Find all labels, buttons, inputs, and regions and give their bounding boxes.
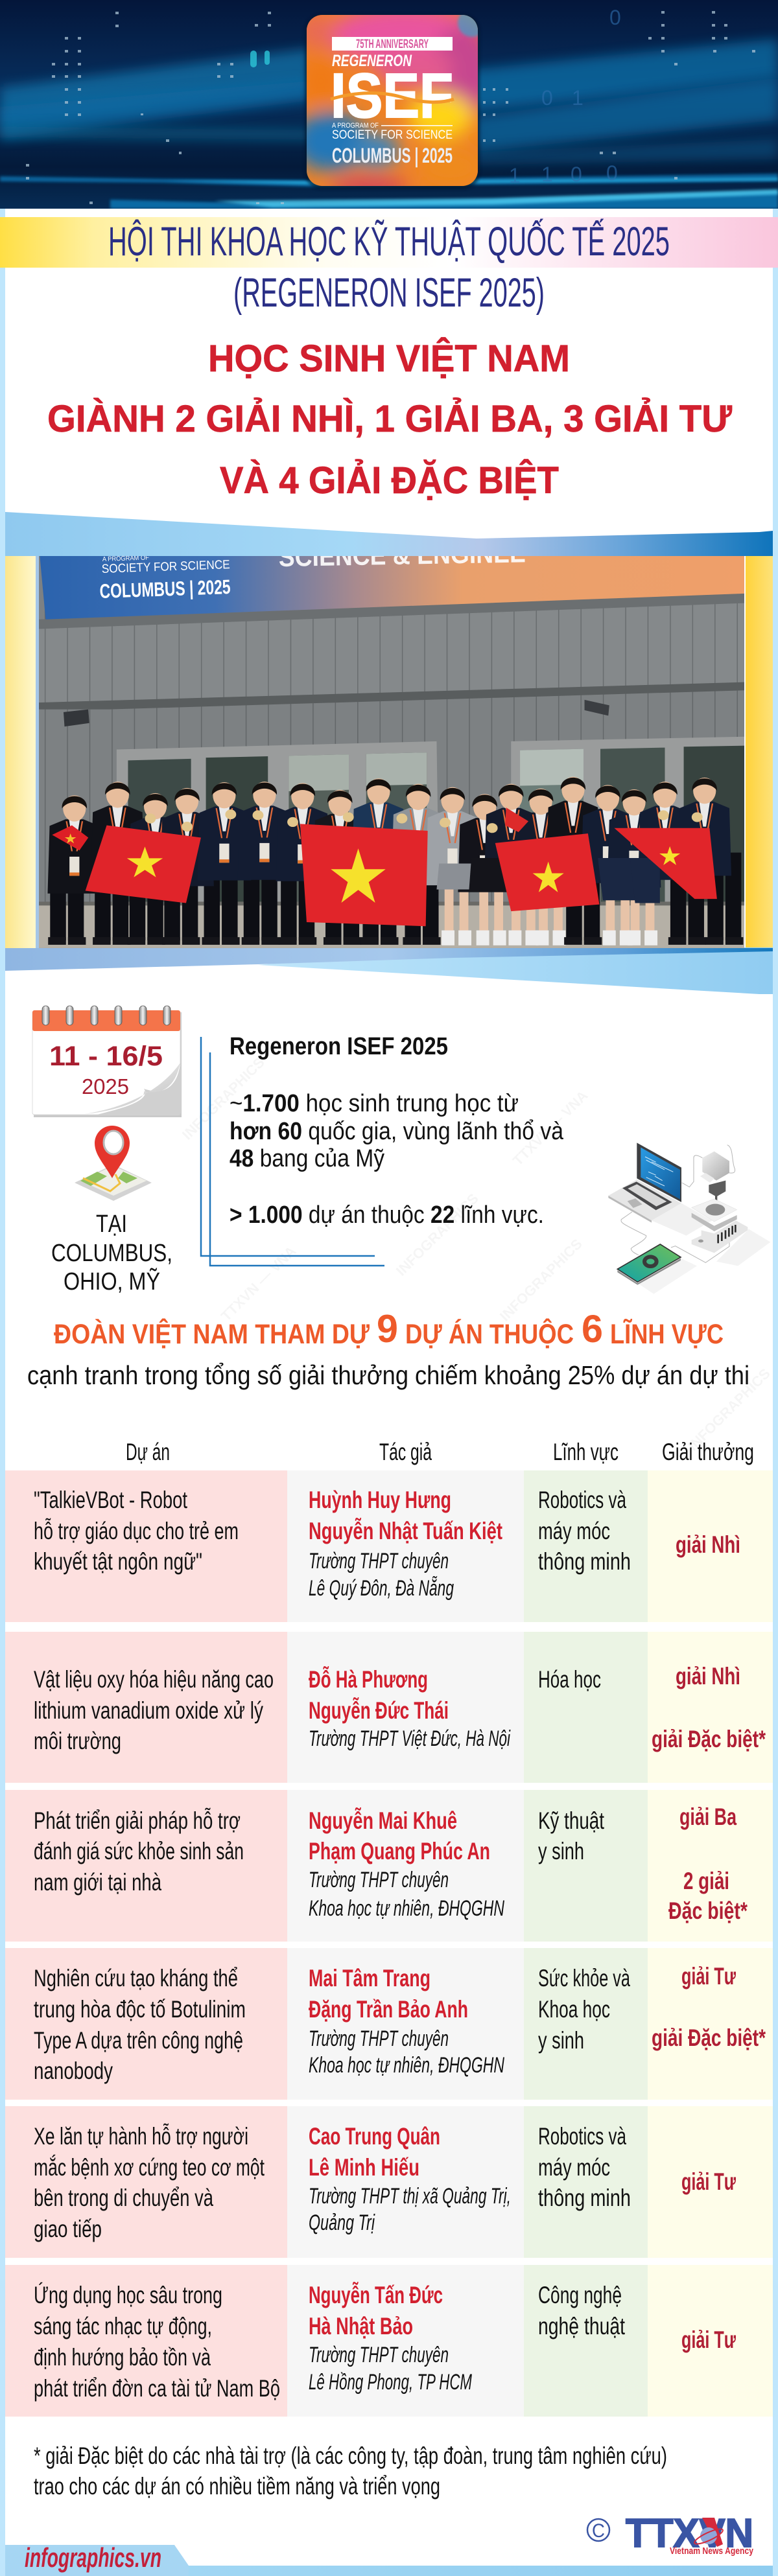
table row 6: [5, 2265, 773, 2417]
binary digits: 1: [509, 164, 521, 187]
table header: Tác giả: [379, 1439, 432, 1465]
field: Robotics và: [538, 2123, 626, 2150]
photo: Vietnamese team with flags: [36, 537, 746, 948]
date: 11 - 16/5: [49, 1041, 163, 1072]
binary digits: 0: [541, 86, 553, 110]
authors: Trường THPT chuyên: [309, 2026, 449, 2051]
awards: [668, 1804, 748, 1924]
project: Nghiên cứu tạo kháng thể: [34, 1965, 238, 1991]
project: Xe lăn tự hành hỗ trợ người: [34, 2123, 248, 2150]
field: thông minh: [538, 2185, 631, 2211]
authors: Trường THPT chuyên: [309, 1868, 449, 1892]
authors: Khoa học tự nhiên, ĐHQGHN: [309, 1896, 504, 1921]
authors: Trường THPT chuyên: [309, 2343, 449, 2367]
authors: [309, 2123, 511, 2235]
location label: COLUMBUS,: [51, 1240, 172, 1267]
field: máy móc: [538, 1518, 610, 1544]
TTXVN logo: C: [592, 2520, 605, 2542]
project: [34, 1807, 244, 1896]
location label: TẠI: [96, 1211, 127, 1238]
headline: [47, 338, 733, 502]
field: y sinh: [538, 2027, 584, 2054]
banner: [40, 556, 744, 620]
project: [34, 1487, 239, 1575]
field: nghệ thuật: [538, 2313, 626, 2339]
authors: Lê Hồng Phong, TP HCM: [309, 2370, 472, 2395]
authors: [309, 1487, 502, 1601]
authors: Phạm Quang Phúc An: [309, 1838, 490, 1864]
award: giải Tư: [681, 2168, 736, 2195]
watermark: INFOGRAPHICS: [497, 1236, 585, 1325]
headline: GIÀNH 2 GIẢI NHÌ, 1 GIẢI BA, 3 GIẢI TƯ: [47, 398, 733, 440]
authors: [309, 1965, 504, 2078]
field: [538, 1807, 605, 1864]
awards: [652, 1663, 766, 1752]
students: [48, 795, 95, 894]
field: Khoa học: [538, 1996, 610, 2023]
project: nam giới tại nhà: [34, 1869, 161, 1896]
location label: [51, 1211, 172, 1295]
authors: Trường THPT Việt Đức, Hà Nội: [309, 1726, 511, 1751]
skirts: [437, 863, 471, 889]
table row 5: [5, 2106, 773, 2258]
delegation headline: 6: [582, 1307, 603, 1351]
watermark: INFOGRAPHICS: [685, 1365, 773, 1454]
authors: Khoa học tự nhiên, ĐHQGHN: [309, 2053, 504, 2078]
project: phát triển đờn ca tài tử Nam Bộ: [34, 2375, 280, 2402]
table header: Lĩnh vực: [553, 1439, 619, 1465]
project: trung hòa độc tố Botulinim: [34, 1996, 246, 2023]
yellow side panel left: [5, 556, 36, 948]
event facts: hơn 60 quốc gia, vùng lãnh thổ và: [230, 1118, 564, 1145]
field: Hóa học: [538, 1666, 601, 1693]
table row 4: [5, 1948, 773, 2100]
watermark: INFOGRAPHICS: [179, 1054, 268, 1143]
TTXVN logo: TTXVN: [626, 2511, 753, 2556]
authors: Trường THPT chuyên: [309, 1549, 449, 1573]
headline: HỌC SINH VIỆT NAM: [208, 338, 570, 380]
awards: Đặc biệt*: [668, 1897, 748, 1924]
field: [538, 1965, 630, 2054]
project: giao tiếp: [34, 2216, 102, 2242]
upper blue ribbon: [5, 512, 773, 556]
project: Type A dựa trên công nghệ: [34, 2027, 243, 2054]
project: sáng tác nhạc tự động,: [34, 2313, 212, 2339]
watermark: TTXVN — VNA: [510, 1087, 591, 1169]
table row 1: [5, 1470, 773, 1622]
ISEF 2025 logo: SOCIETY FOR SCIENCE: [332, 128, 453, 142]
authors: Mai Tâm Trang: [309, 1965, 430, 1991]
authors: Lê Quý Đôn, Đà Nẵng: [309, 1576, 454, 1601]
authors: Hà Nhật Bảo: [309, 2313, 413, 2339]
speakers: [64, 710, 89, 726]
field: Công nghệ: [538, 2282, 622, 2308]
authors: [309, 1807, 504, 1921]
delegation headline: ĐOÀN VIỆT NAM THAM DỰ: [54, 1318, 370, 1350]
yellow side panel right: [746, 556, 773, 948]
authors: Đỗ Hà Phương: [309, 1666, 428, 1693]
field: [538, 1487, 631, 1575]
banner lettering: SCIENCE & ENGINEE: [278, 537, 526, 572]
award: giải Tư: [681, 2327, 736, 2353]
binary digits: 0: [571, 163, 582, 186]
watermark: TTXVN — VNA: [218, 1243, 300, 1325]
ISEF 2025 logo: 75TH ANNIVERSARY: [356, 38, 429, 51]
watermark: [179, 1054, 773, 1454]
watermark: INFOGRAPHICS: [393, 1190, 482, 1279]
TTXVN logo: Vietnam News Agency: [670, 2546, 754, 2557]
awards: [652, 1963, 766, 2051]
flags: [52, 826, 88, 850]
field: [538, 2282, 626, 2339]
authors: [309, 1666, 511, 1751]
field: Sức khỏe và: [538, 1965, 630, 1991]
field: Robotics và: [538, 1487, 626, 1513]
awards: giải Ba: [679, 1804, 737, 1830]
location label: OHIO, MỸ: [64, 1268, 160, 1295]
binary digits: 1: [572, 86, 584, 110]
table header: [126, 1439, 754, 1465]
binary digits: 1: [541, 163, 553, 186]
medals: [145, 809, 703, 833]
banner lettering: [100, 556, 525, 599]
event facts: ~1.700 học sinh trung học từ: [230, 1090, 519, 1117]
project: Ứng dụng học sâu trong: [34, 2282, 222, 2308]
awards: giải Nhì: [676, 1663, 740, 1689]
bracket lines: [201, 1037, 384, 1266]
ISEF 2025 logo: [303, 14, 481, 189]
title line 2: (REGENERON ISEF 2025): [233, 270, 545, 316]
ISEF 2025 logo: ISEF: [331, 60, 453, 131]
awards: giải Tư: [681, 1963, 736, 1990]
event facts: [230, 1033, 564, 1229]
photo left trim: [36, 556, 39, 948]
icon: laptop, machine and phone: [608, 1143, 770, 1294]
field: máy móc: [538, 2154, 610, 2181]
authors: Nguyễn Tấn Đức: [309, 2282, 443, 2308]
ISEF 2025 logo: REGENERON: [332, 52, 412, 70]
table row 2: [5, 1632, 773, 1783]
doors: [117, 741, 439, 910]
project: Vật liệu oxy hóa hiệu năng cao: [34, 1666, 274, 1693]
location pin icon: [75, 1126, 152, 1201]
delegation headline: DỰ ÁN THUỘC: [405, 1318, 574, 1350]
project: mắc bệnh xơ cứng teo cơ một: [34, 2154, 265, 2181]
delegation headline: 9: [377, 1307, 398, 1351]
project: [34, 2282, 280, 2402]
project: lithium vanadium oxide xử lý: [34, 1697, 263, 1724]
ISEF 2025 logo: COLUMBUS | 2025: [332, 144, 453, 167]
project: nanobody: [34, 2058, 113, 2084]
authors: Nguyễn Mai Khuê: [309, 1807, 457, 1834]
project: đánh giá sức khỏe sinh sản: [34, 1838, 244, 1864]
binary digits: [509, 6, 621, 187]
authors: Đặng Trần Bảo Anh: [309, 1996, 468, 2023]
binary digits: 0: [609, 6, 621, 29]
project: [34, 1666, 274, 1754]
project: Phát triển giải pháp hỗ trợ: [34, 1807, 241, 1834]
delegation headline: [54, 1307, 724, 1351]
binary digits: 0: [606, 161, 618, 185]
banner lettering: COLUMBUS | 2025: [99, 575, 231, 603]
banner lettering: SOCIETY FOR SCIENCE: [101, 558, 230, 576]
project: [34, 1965, 246, 2084]
site credit: infographics.vn: [25, 2542, 161, 2573]
event facts: 48 bang của Mỹ: [230, 1145, 384, 1172]
legs: [48, 893, 86, 945]
headline: VÀ 4 GIẢI ĐẶC BIỆT: [220, 459, 559, 502]
calendar icon: 2025: [82, 1074, 129, 1098]
field: thông minh: [538, 1548, 631, 1575]
authors: Huỳnh Huy Hưng: [309, 1487, 451, 1513]
award: giải Nhì: [676, 1531, 740, 1558]
authors: Cao Trung Quân: [309, 2123, 440, 2150]
project: định hướng bảo tồn và: [34, 2344, 211, 2371]
project: khuyết tật ngôn ngữ": [34, 1548, 202, 1575]
table row 3: [5, 1790, 773, 1942]
authors: Nguyễn Nhật Tuấn Kiệt: [309, 1518, 502, 1544]
field: y sinh: [538, 1838, 584, 1864]
footer band: [5, 2542, 773, 2576]
project: "TalkieVBot - Robot: [34, 1487, 188, 1513]
authors: Quảng Trị: [309, 2210, 375, 2235]
header banner: dark technology background: [0, 0, 778, 209]
awards: 2 giải: [683, 1868, 729, 1894]
lower blue ribbon: [5, 947, 773, 994]
project: môi trường: [34, 1728, 121, 1754]
calendar icon: [32, 1006, 182, 1117]
project: hỗ trợ giáo dục cho trẻ em: [34, 1518, 239, 1544]
footnote: trao cho các dự án có nhiều tiềm năng và triển vọng: [34, 2473, 440, 2500]
authors: Nguyễn Đức Thái: [309, 1697, 449, 1724]
delegation headline: LĨNH VỰC: [610, 1319, 724, 1350]
authors: Trường THPT thị xã Quảng Trị,: [309, 2184, 511, 2209]
event facts: > 1.000 dự án thuộc 22 lĩnh vực.: [230, 1201, 544, 1229]
authors: [309, 2282, 472, 2395]
ISEF 2025 logo: A PROGRAM OF: [332, 122, 379, 130]
authors: Lê Minh Hiếu: [309, 2154, 419, 2181]
title band: [0, 217, 778, 268]
table header: Dự án: [126, 1439, 170, 1465]
event facts: Regeneron ISEF 2025: [230, 1033, 448, 1060]
project: [34, 2123, 265, 2242]
footnote: [34, 2443, 667, 2500]
field: Kỹ thuật: [538, 1807, 605, 1834]
project: bên trong di chuyển và: [34, 2185, 213, 2211]
field: [538, 2123, 631, 2211]
banner lettering: A PROGRAM OF: [102, 554, 149, 563]
